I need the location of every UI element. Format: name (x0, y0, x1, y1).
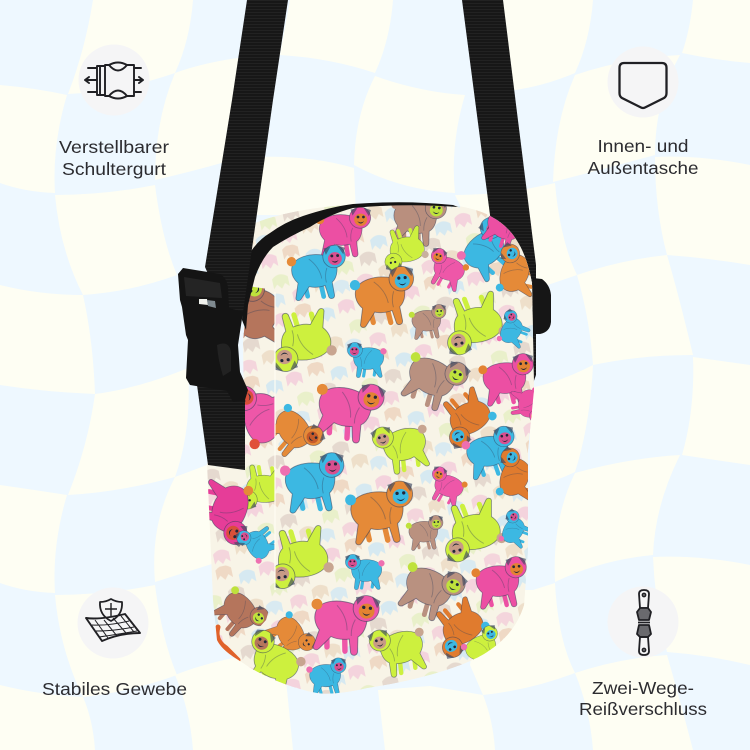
feature: two-way zipper (579, 586, 707, 719)
feature: two-way zipper: Reißverschluss (579, 699, 707, 719)
pug print: front panel pugs (250, 204, 534, 694)
label: Innen- und (598, 136, 688, 156)
feature: adjustable shoulder strap (59, 44, 169, 179)
icon: side-release buckle (78, 44, 150, 116)
right shoulder strap (462, 0, 536, 392)
left shoulder strap lower section (197, 385, 245, 470)
right side buckle (533, 278, 551, 334)
bag body with pug print (207, 204, 534, 694)
pocket seam (274, 292, 276, 590)
icon: two zipper pulls (608, 586, 678, 658)
pug print: side panel pugs (208, 286, 275, 662)
label: Stabiles Gewebe (42, 679, 187, 699)
feature: adjustable shoulder strap: Schultergurt (62, 159, 166, 179)
label: Zwei-Wege- (592, 678, 694, 698)
feature: inner and outer pocket (588, 46, 698, 178)
label: Verstellbarer (59, 137, 169, 157)
left shoulder strap upper section (205, 0, 288, 312)
plastic buckle (178, 268, 248, 402)
feature: durable fabric (42, 588, 187, 699)
feature: inner and outer pocket: Außentasche (588, 158, 698, 178)
icon: pocket (608, 46, 678, 118)
icon: shield over woven fabric (78, 588, 148, 658)
zipper along bag top (242, 202, 458, 330)
